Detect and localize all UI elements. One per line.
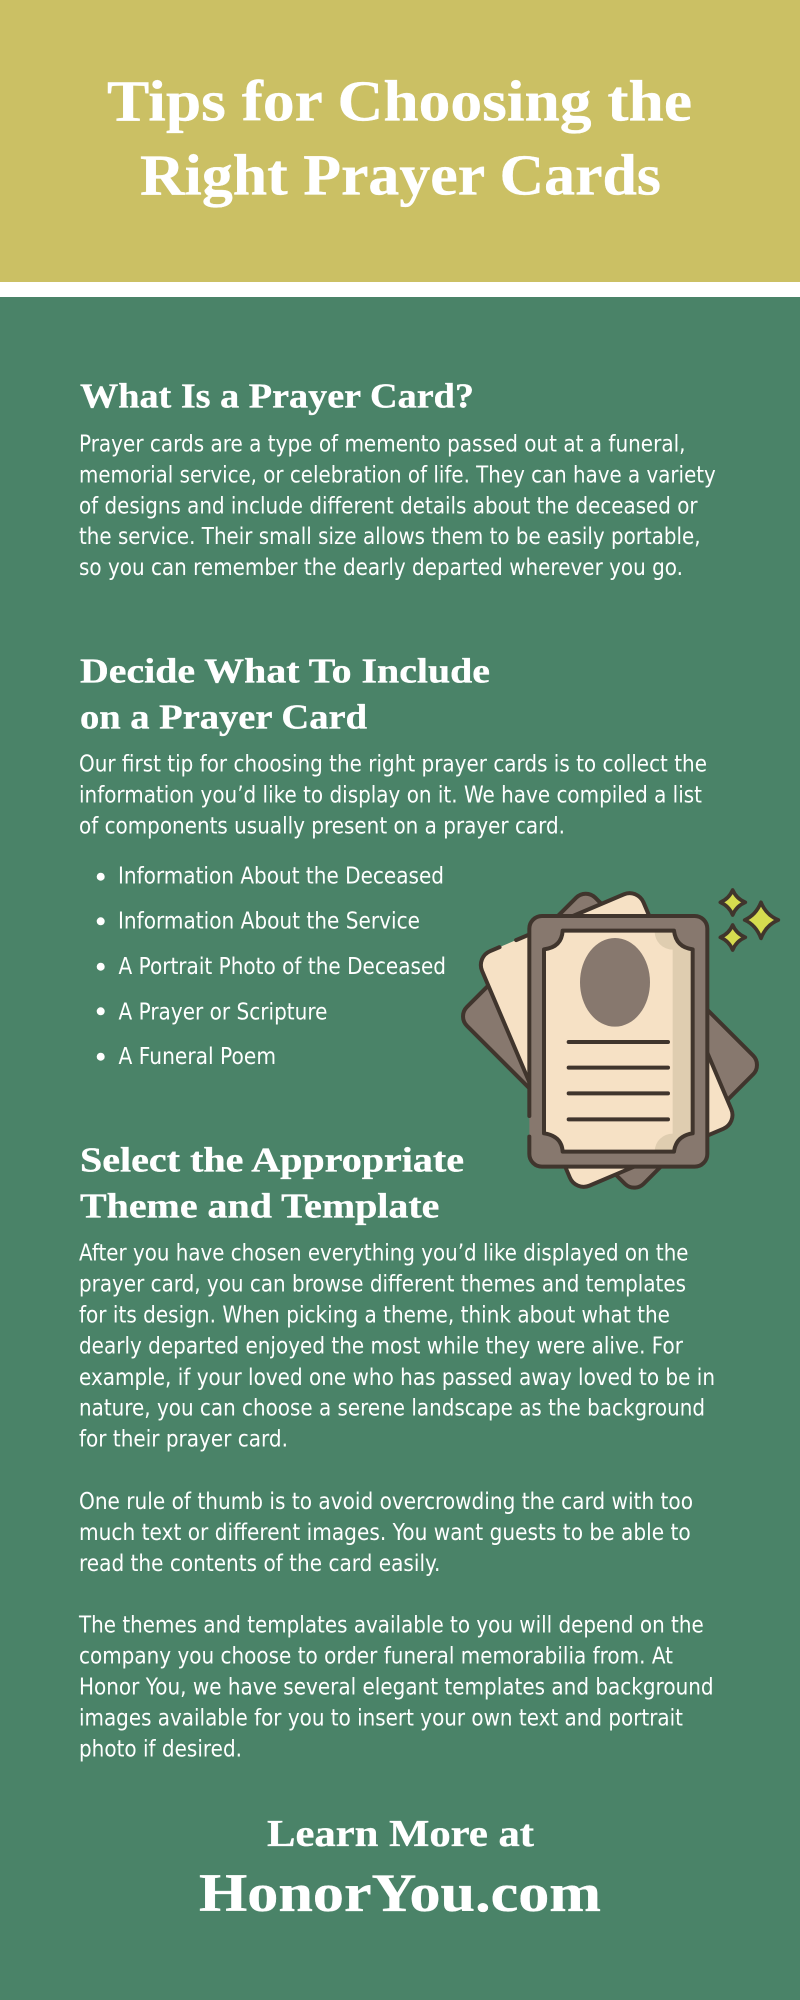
text block: browsing themes: After you have chosen everything you’d like displayed on the xyxy=(79,1241,688,1267)
text block: first tip intro: information you’d like to display on it. We have compiled a list xyxy=(79,783,702,809)
text block: prayer card definition: of designs and include different details about the deceased or xyxy=(79,493,698,519)
text block: browsing themes: for their prayer card. xyxy=(79,1427,288,1453)
text block: first tip intro xyxy=(79,752,707,839)
text block: availability at Honor You: photo if desired. xyxy=(79,1737,242,1763)
text block: browsing themes: prayer card, you can browse different themes and templates xyxy=(79,1272,686,1298)
text block: browsing themes: for its design. When picking a theme, think about what the xyxy=(79,1303,670,1329)
sparkles xyxy=(720,890,778,950)
call to action: Learn More at xyxy=(267,1813,534,1855)
text block: rule of thumb xyxy=(79,1489,693,1577)
bullet list: prayer card components xyxy=(97,863,446,1070)
text block: rule of thumb: One rule of thumb is to avoid overcrowding the card with too xyxy=(79,1489,693,1515)
heading: select the appropriate theme and template: Select the Appropriate xyxy=(80,1142,464,1180)
text block: rule of thumb: read the contents of the card easily. xyxy=(79,1551,440,1577)
bullet list: prayer card components: Information About the Deceased xyxy=(118,863,444,889)
title: Right Prayer Cards xyxy=(140,142,661,208)
heading: select the appropriate theme and template: Theme and Template xyxy=(80,1188,439,1226)
bullet list: prayer card components: A Portrait Photo of the Deceased xyxy=(118,954,446,980)
icon: prayer cards illustration xyxy=(458,888,778,1193)
text block: first tip intro: Our first tip for choosing the right prayer cards is to collect the xyxy=(79,752,707,778)
white divider band xyxy=(0,282,800,297)
middle cream card xyxy=(476,889,737,1191)
section: decide what to include xyxy=(79,652,707,1070)
text block: prayer card definition: so you can remember the dearly departed wherever you go. xyxy=(79,555,683,581)
bullet list: prayer card components: A Prayer or Scripture xyxy=(118,999,328,1025)
heading: decide what to include xyxy=(80,652,490,736)
text block: first tip intro: of components usually present on a prayer card. xyxy=(79,813,565,839)
text block: browsing themes xyxy=(79,1241,715,1453)
heading: what is a prayer card: What Is a Prayer Card? xyxy=(80,378,474,416)
text block: availability at Honor You: The themes and templates available to you will depend on the xyxy=(78,1613,704,1639)
text block: browsing themes: nature, you can choose a serene landscape as the background xyxy=(79,1396,705,1422)
text block: prayer card definition xyxy=(79,432,716,581)
text block: prayer card definition: the service. Their small size allows them to be easily portable, xyxy=(79,524,701,550)
text block: availability at Honor You xyxy=(78,1613,714,1763)
text block: availability at Honor You: Honor You, we have several elegant templates and background xyxy=(79,1675,714,1701)
call to action xyxy=(199,1813,601,1923)
section: what is a prayer card xyxy=(79,378,716,581)
back brown card xyxy=(458,888,762,1193)
heading: decide what to include: on a Prayer Card xyxy=(80,698,367,736)
front card xyxy=(529,914,707,1170)
text block: prayer card definition: memorial service, or celebration of life. They can have a variety xyxy=(79,462,716,488)
section: select theme and template xyxy=(78,1142,715,1763)
text block: prayer card definition: Prayer cards are a type of memento passed out at a funeral, xyxy=(79,432,686,458)
header panel xyxy=(0,0,800,282)
text block: availability at Honor You: images available for you to insert your own text and portrait xyxy=(79,1706,683,1732)
title xyxy=(107,68,692,208)
call to action: HonorYou.com xyxy=(199,1863,601,1923)
text block: rule of thumb: much text or different images. You want guests to be able to xyxy=(79,1520,691,1546)
heading: select the appropriate theme and template xyxy=(80,1142,464,1226)
text block: browsing themes: example, if your loved one who has passed away loved to be in xyxy=(79,1365,715,1391)
title: Tips for Choosing the xyxy=(107,68,692,134)
text block: availability at Honor You: company you choose to order funeral memorabilia from. At xyxy=(79,1644,673,1670)
heading: decide what to include: Decide What To Include xyxy=(80,652,490,690)
text block: browsing themes: dearly departed enjoyed the most while they were alive. For xyxy=(79,1334,683,1360)
bullet list: prayer card components: Information About the Service xyxy=(118,909,420,935)
bullet list: prayer card components: A Funeral Poem xyxy=(118,1044,276,1070)
